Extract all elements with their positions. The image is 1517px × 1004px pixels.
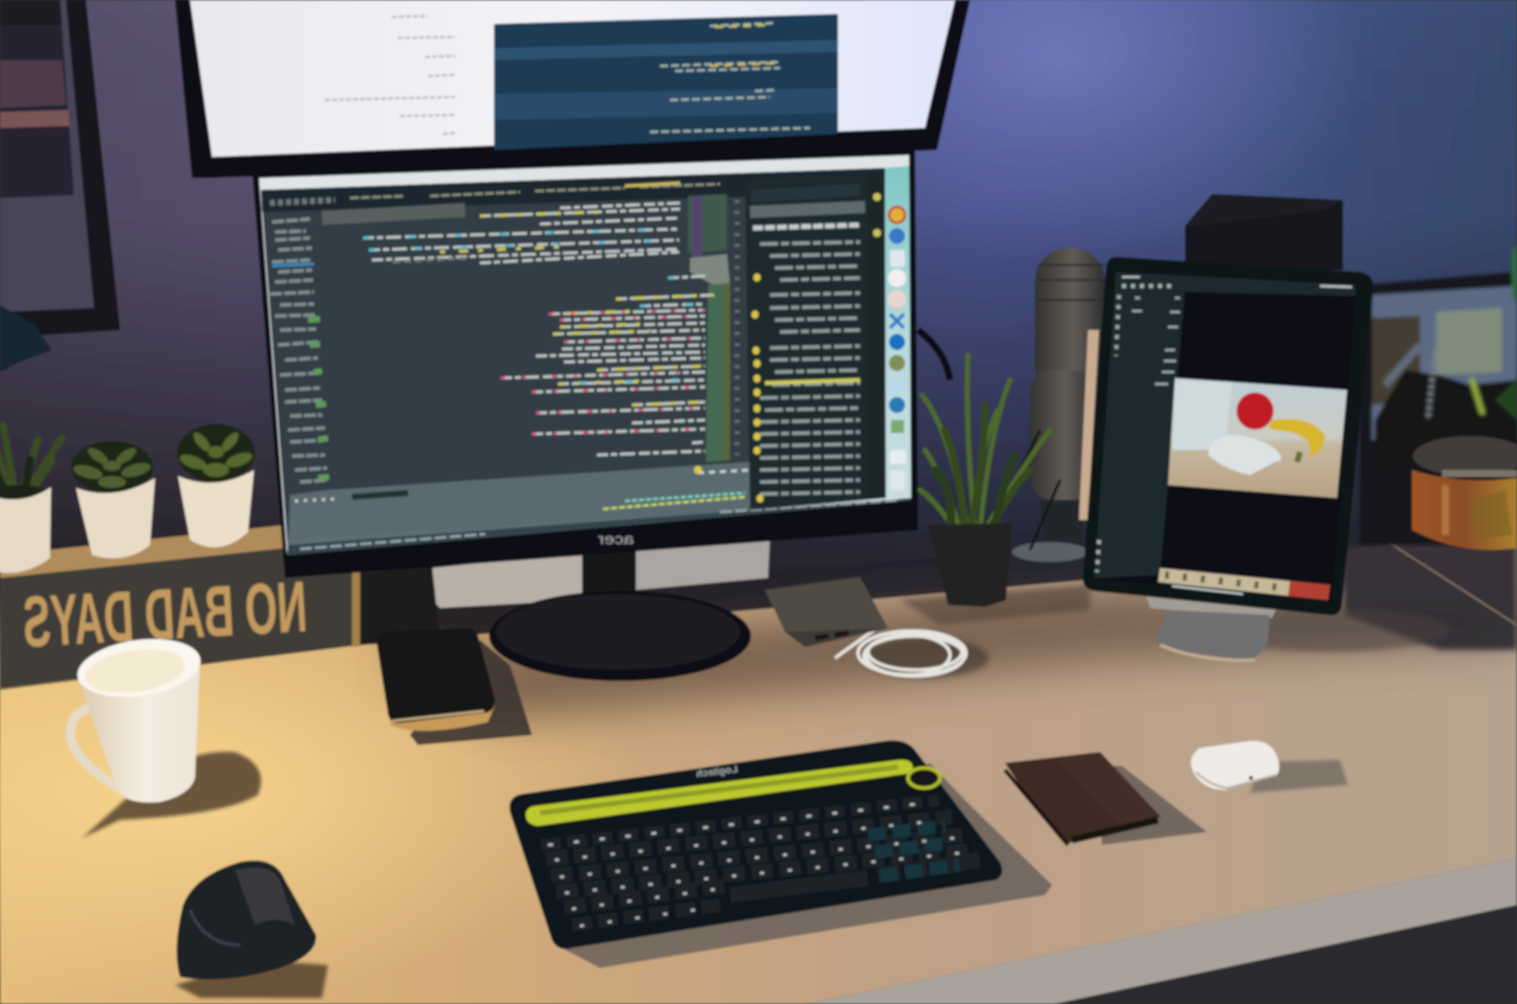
laptop behind monitor xyxy=(360,535,770,645)
handle xyxy=(70,707,125,792)
editor side panel xyxy=(1094,272,1356,578)
plant: right succulent xyxy=(177,424,255,482)
monitor stand and base xyxy=(489,540,751,681)
keyboard xyxy=(510,740,1052,968)
edited photo: apple, banana, earbuds xyxy=(1168,378,1347,498)
tab bar xyxy=(261,168,885,212)
desk top surface xyxy=(0,530,1517,1004)
sidebar minimap xyxy=(270,219,328,482)
status bar xyxy=(287,498,911,555)
succulent pots row xyxy=(0,424,255,573)
body xyxy=(78,660,200,802)
speaker behind tablet xyxy=(1185,194,1343,270)
shelf box with slogan xyxy=(0,525,360,688)
candle jar xyxy=(1412,436,1517,550)
pot: right xyxy=(178,470,254,547)
usb hub xyxy=(765,577,888,647)
framed picture on left wall xyxy=(0,0,120,338)
leaves xyxy=(920,355,1050,530)
body xyxy=(510,740,1002,949)
yellow-green tray xyxy=(526,760,913,826)
apple pencil xyxy=(1079,330,1099,520)
centre plant xyxy=(920,355,1050,607)
pot: middle xyxy=(76,478,155,558)
wall background xyxy=(0,0,1517,700)
shadow xyxy=(82,752,261,838)
screen xyxy=(259,155,911,555)
filmstrip thumbnails xyxy=(1158,568,1330,600)
wireless earbuds case xyxy=(1191,741,1348,793)
dial ring xyxy=(908,768,940,788)
desk lamp xyxy=(0,305,52,372)
code lines xyxy=(363,203,714,455)
plant: middle succulent xyxy=(71,441,153,493)
plant: left spiky xyxy=(0,425,62,505)
right tool strip xyxy=(868,174,885,498)
desk front edge xyxy=(806,858,1517,1004)
right outline panel xyxy=(745,175,885,510)
microphone xyxy=(918,248,1105,562)
pot: left xyxy=(0,487,51,573)
pot xyxy=(928,523,1012,607)
top monitor xyxy=(175,0,970,178)
brand mark: acer, mirrored: acer xyxy=(598,531,634,548)
tablet stand xyxy=(1145,593,1450,660)
code block xyxy=(494,14,838,150)
sidebar navigation text xyxy=(325,16,455,134)
code gutter colour bands xyxy=(688,194,727,253)
coffee mug xyxy=(70,632,261,838)
cable coil xyxy=(835,626,989,678)
main monitor xyxy=(252,150,918,578)
terminal panel xyxy=(288,462,749,552)
shadow xyxy=(556,763,1052,968)
leather wallet xyxy=(1005,752,1207,845)
logo: Logitech xyxy=(696,764,738,780)
dock with app icons xyxy=(885,166,911,498)
framed art and clutter at right xyxy=(1360,245,1517,545)
tablet xyxy=(1083,257,1373,615)
key rows xyxy=(541,800,980,925)
key legends xyxy=(548,802,970,926)
computer mouse xyxy=(175,860,328,998)
teal keys xyxy=(868,826,960,876)
phone on charger xyxy=(377,628,532,745)
